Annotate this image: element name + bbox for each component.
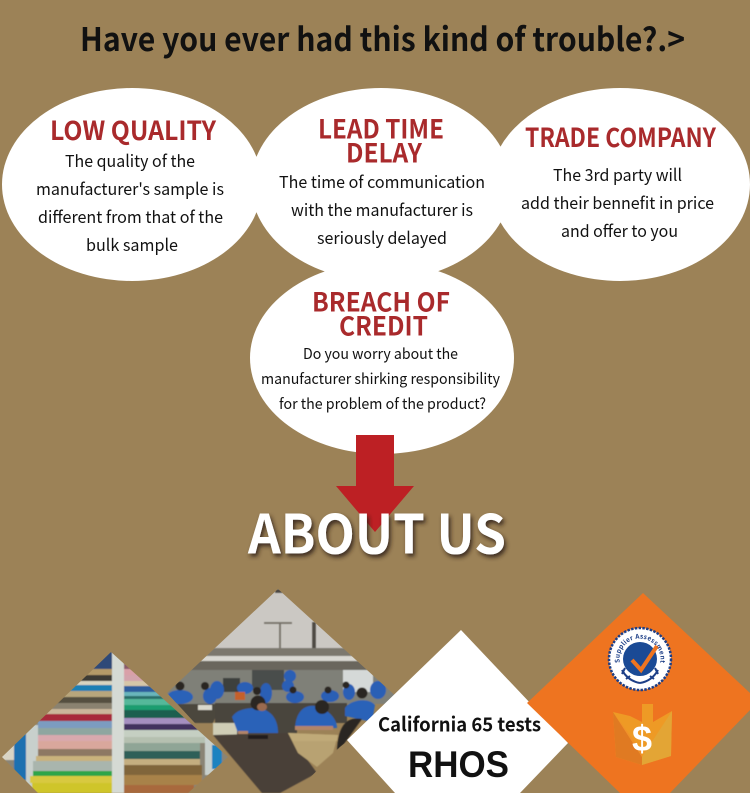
text: lead time description: The time of communication: [279, 169, 485, 193]
heading: lead time delay: LEAD TIME: [318, 110, 444, 146]
heading: breach of credit: [312, 282, 450, 344]
background workers: [167, 690, 193, 704]
text: low quality description: manufacturer's sample is: [36, 176, 224, 200]
text: lead time description: seriously delayed: [317, 225, 447, 249]
text: low quality description: The quality of the: [65, 148, 195, 172]
text: RHOS: RHOS: [408, 744, 509, 785]
panel: breach of credit: [250, 262, 514, 454]
heading: breach of credit: BREACH OF: [312, 282, 450, 320]
text: trade company description: add their bennefit in price: [521, 190, 714, 214]
photo: factory workers: [160, 585, 405, 793]
title: Have you ever had this kind of trouble?.>: [80, 14, 685, 61]
icon: supplier assessment badge: [608, 626, 672, 692]
icon: shopping bag with dollar sign: [613, 704, 672, 765]
ceiling: [214, 589, 344, 649]
text: lead time description: with the manufacturer is: [291, 197, 473, 221]
text: low quality description: different from that of the: [38, 204, 223, 228]
heading: about us: ABOUT US: [247, 490, 506, 570]
text: low quality description: [36, 148, 224, 256]
panel: trade company: [490, 88, 750, 281]
icon: supplier assessment badge: Supplier Assessment: [614, 634, 665, 663]
text: trade company description: [521, 162, 714, 242]
heading: lead time delay: DELAY: [346, 134, 423, 170]
arrow: red down arrow: [336, 435, 414, 532]
heading: low quality: LOW QUALITY: [50, 111, 217, 148]
heading: lead time delay: [318, 110, 444, 170]
heading: trade company: TRADE COMPANY: [525, 118, 717, 155]
icon: shopping bag with dollar sign: $: [632, 718, 652, 759]
panel: white diamond certificates: [347, 630, 568, 793]
text: breach of credit description: [261, 343, 500, 414]
panel: orange diamond: [527, 593, 750, 793]
panel: lead time delay: [251, 88, 511, 281]
text: breach of credit description: for the problem of the product?: [279, 393, 486, 414]
panel: low quality: [2, 88, 262, 281]
photo: fabric colour swatches: [0, 650, 240, 793]
tables: [177, 704, 221, 723]
front workers: [232, 708, 278, 733]
text: trade company description: and offer to you: [561, 218, 678, 242]
text: california 65 tests: California 65 tests: [378, 708, 541, 738]
text: breach of credit description: Do you worry about the: [303, 343, 458, 364]
heading: breach of credit: CREDIT: [339, 306, 428, 344]
text: lead time description: [279, 169, 485, 249]
text: breach of credit description: manufacturer shirking responsibility: [261, 368, 500, 389]
text: low quality description: bulk sample: [86, 232, 178, 256]
text: trade company description: The 3rd party will: [553, 162, 682, 186]
